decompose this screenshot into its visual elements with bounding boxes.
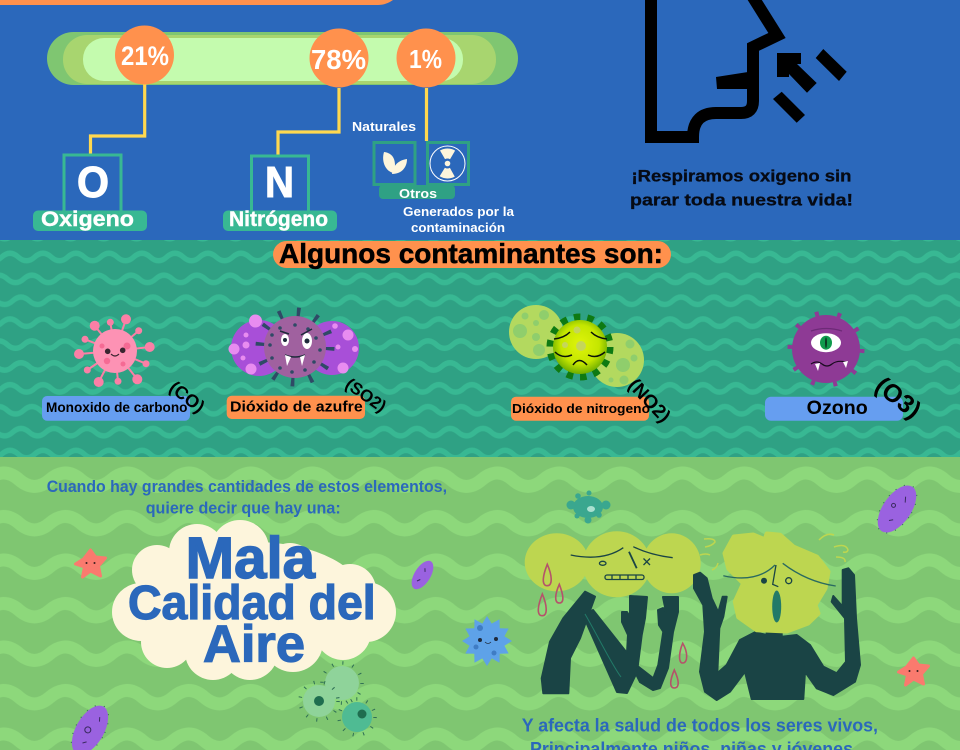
callout: cloud mala calidad del aire: Aire (203, 616, 305, 674)
badge: 78%: 78% (311, 44, 366, 75)
icon: leaves (374, 142, 415, 184)
text: generados por la contaminacion (403, 204, 515, 235)
icon: teal germ (566, 490, 610, 524)
connector: nitrogen (278, 88, 339, 155)
icon: red germ right (898, 658, 928, 685)
connector: others (425, 88, 428, 141)
text: cuando hay grandes cantidades: Cuando hay grandes cantidades de estos elementos, (47, 478, 447, 496)
text: generados por la contaminacion: contaminación (411, 220, 505, 235)
icon: green nitrogen dioxide virus (509, 305, 644, 387)
label: otros (379, 185, 455, 201)
panel: blue air composition section (0, 0, 960, 240)
label: naturales: Naturales (352, 119, 416, 134)
label: monoxido de carbono: Monoxido de carbono (46, 400, 188, 415)
icon: purple ozone virus (790, 313, 862, 385)
text: cuando hay grandes cantidades: quiere decir que hay una: (146, 500, 341, 518)
text: respiramos (630, 166, 853, 210)
text: y afecta la salud (522, 716, 878, 750)
badge: 1%: 1% (409, 44, 442, 74)
element card: nitrogen (223, 156, 337, 231)
text: respiramos: parar toda nuestra vida! (630, 190, 853, 210)
panel: teal pollutants section (0, 240, 960, 457)
callout: cloud mala calidad del aire: Calidad del (128, 577, 376, 630)
connector: oxygen (90, 84, 145, 154)
text: SO2 formula: (SO2) (342, 375, 390, 416)
illustration: shocked person right (694, 534, 860, 700)
heading: algunos contaminantes: Algunos contaminantes son: (279, 238, 663, 269)
icon: purple sulfur dioxide virus (228, 312, 359, 382)
bar: air composition (47, 32, 518, 85)
icon: large purple bacterium bottom (64, 700, 116, 750)
text: respiramos: ¡Respiramos oxigeno sin (632, 166, 852, 186)
callout: cloud mala calidad del aire: Mala (186, 526, 316, 591)
text: CO formula: (CO) (165, 377, 209, 417)
icon: red germ left (76, 550, 106, 577)
element card: oxygen: O (77, 158, 109, 207)
text: cuando hay grandes cantidades (47, 478, 447, 518)
badge: 78% (310, 28, 368, 88)
icon: small purple bacterium (407, 557, 438, 593)
label: ozono (765, 397, 903, 421)
label: ozono: Ozono (807, 398, 868, 419)
label: dioxido de nitrogeno (511, 397, 650, 421)
badge: 1% (396, 28, 456, 88)
element card: nitrogen: Nitrógeno (229, 208, 328, 231)
icon: head breathing (651, 0, 847, 137)
badge: 21%: 21% (121, 41, 169, 71)
badge: 21% (115, 26, 174, 84)
text: NO2 formula: (NO2) (624, 375, 674, 427)
callout: cloud mala calidad del aire (112, 520, 396, 680)
panel: green bad air quality section (0, 457, 960, 750)
label: dioxido de azufre: Dióxido de azufre (230, 398, 363, 416)
text: O3 formula: (O3) (870, 372, 926, 424)
text: generados por la contaminacion: Generados por la (403, 204, 515, 219)
icon: blue virus (462, 616, 512, 666)
label: monoxido de carbono (42, 396, 190, 421)
text: y afecta la salud: Y afecta la salud de todos los seres vivos, (522, 716, 878, 736)
icon: pink virus (74, 314, 155, 387)
icon: green virus group (300, 663, 375, 735)
label: dioxido de nitrogeno: Dióxido de nitrogeno (512, 402, 650, 416)
icon: purple bacterium right (870, 479, 924, 539)
label: otros: Otros (399, 186, 437, 201)
top orange banner edge (0, 0, 393, 5)
element card: oxygen: Oxigeno (41, 208, 134, 231)
element card: oxygen (33, 155, 147, 231)
icon: radiation (428, 142, 468, 184)
element card: nitrogen: N (265, 158, 294, 207)
label: dioxido de azufre (227, 396, 365, 419)
illustration: sick person left (525, 531, 701, 693)
